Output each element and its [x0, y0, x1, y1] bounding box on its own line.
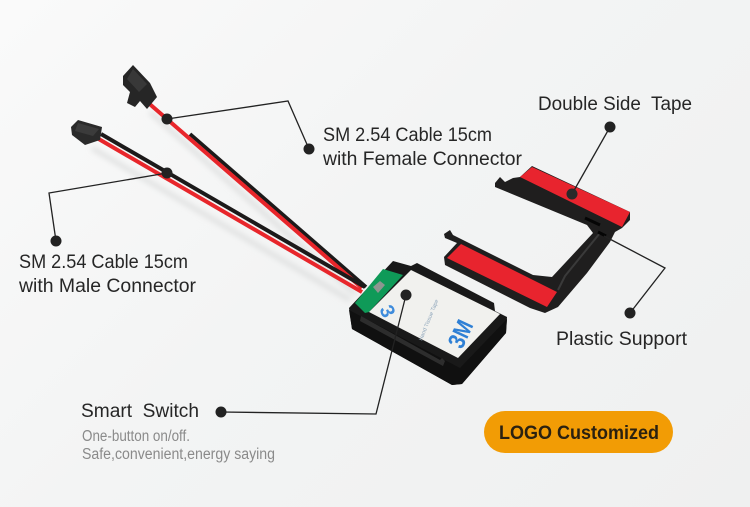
- cable: male connector: [92, 134, 365, 300]
- label: male cable: [18, 252, 197, 297]
- badge: logo customized: [484, 411, 673, 453]
- connector: male: [71, 120, 102, 145]
- badge: logo customized: LOGO Customized: [499, 422, 659, 444]
- label: female cable: with Female Connector: [322, 149, 523, 170]
- smart switch module: [349, 261, 507, 385]
- cable: female connector: [145, 100, 366, 294]
- leader line: female cable: [162, 101, 314, 154]
- upper red tape: [520, 167, 630, 227]
- label: female cable: SM 2.54 Cable 15cm: [323, 125, 492, 146]
- adhesive sticker: [369, 270, 500, 358]
- leader line: smart switch: [216, 290, 412, 418]
- sticker fine print: Hand Tissue Tape: [418, 299, 440, 342]
- lower red tape: [447, 244, 557, 307]
- label: male cable: with Male Connector: [18, 276, 197, 297]
- leader line: plastic support: [604, 236, 665, 318]
- label: plastic support: Plastic Support: [556, 329, 688, 350]
- circuit board: [355, 269, 403, 313]
- leader line: double side tape: [566, 122, 616, 200]
- sticker logo: small 3: 3: [374, 302, 399, 321]
- description: smart switch: [82, 428, 275, 463]
- description: smart switch: One-button on/off.: [82, 428, 190, 445]
- label: female cable: [322, 125, 523, 170]
- label: male cable: SM 2.54 Cable 15cm: [19, 252, 188, 273]
- solder joints: [373, 281, 385, 293]
- sticker logo: 3M: 3M: [442, 316, 479, 352]
- leader line: male cable: [49, 168, 172, 246]
- connector: female: [123, 65, 157, 109]
- description: smart switch: Safe,convenient,energy saying: [82, 446, 275, 463]
- label: smart switch: Smart Switch: [81, 401, 199, 422]
- plastic support with tape: [444, 166, 630, 313]
- label: double side tape: Double Side Tape: [538, 94, 692, 115]
